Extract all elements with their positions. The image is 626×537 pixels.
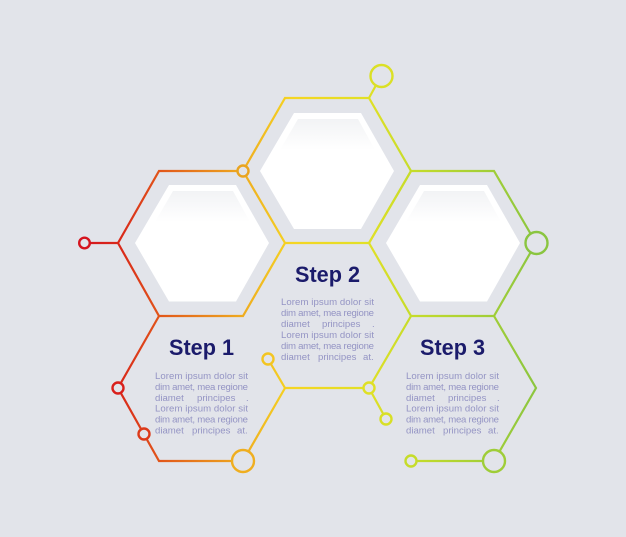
text block: step 2: dim amet, mea regione <box>281 341 374 352</box>
text block: step 1: diamet <box>155 393 184 404</box>
heading: step 1: Step 1 <box>169 335 234 360</box>
white hexagon panel: step 3 <box>386 185 520 302</box>
text block: step 3 <box>406 371 500 436</box>
text block: step 3: diamet <box>406 426 435 436</box>
honeycomb outline network <box>85 76 536 461</box>
text block: step 2: Lorem ipsum dolor sit <box>281 330 374 341</box>
text block: step 3: at. <box>488 426 499 436</box>
text block: step 3: Lorem ipsum dolor sit <box>406 371 499 382</box>
text block: step 1: dim amet, mea regione <box>155 414 248 426</box>
text block: step 2: at. <box>363 352 374 363</box>
text block: step 2: Lorem ipsum dolor sit <box>281 297 374 308</box>
white hexagon panel: step 2 <box>260 113 394 229</box>
text block: step 2: diamet <box>281 319 310 330</box>
text block: step 3: diamet <box>406 393 435 404</box>
connector nodes <box>79 65 547 472</box>
text block: step 3: principes <box>448 393 487 404</box>
text block: step 2: diamet <box>281 352 310 363</box>
text block: step 1: principes <box>197 393 236 404</box>
text block: step 1: Lorem ipsum dolor sit <box>155 404 248 414</box>
text block: step 3: Lorem ipsum dolor sit <box>406 404 499 414</box>
text block: step 1: diamet <box>155 426 184 436</box>
white hexagon panel: step 1 <box>135 185 269 302</box>
heading: step 3: Step 3 <box>420 335 485 360</box>
text block: step 3: dim amet, mea regione <box>406 414 499 426</box>
text block: step 3: principes <box>443 426 482 436</box>
text block: step 1 <box>155 371 249 436</box>
text block: step 2: principes <box>318 352 357 363</box>
text block: step 3: . <box>497 393 500 404</box>
text block: step 2 <box>281 297 375 363</box>
text block: step 2: . <box>372 319 375 330</box>
text block: step 3: dim amet, mea regione <box>406 382 499 393</box>
text block: step 1: principes <box>192 426 231 436</box>
text block: step 1: . <box>246 393 249 404</box>
text block: step 2: principes <box>322 319 361 330</box>
text block: step 1: at. <box>237 426 248 436</box>
text block: step 2: dim amet, mea regione <box>281 308 374 319</box>
text block: step 1: dim amet, mea regione <box>155 382 248 393</box>
text block: step 1: Lorem ipsum dolor sit <box>155 371 248 382</box>
heading: step 2: Step 2 <box>295 262 360 287</box>
